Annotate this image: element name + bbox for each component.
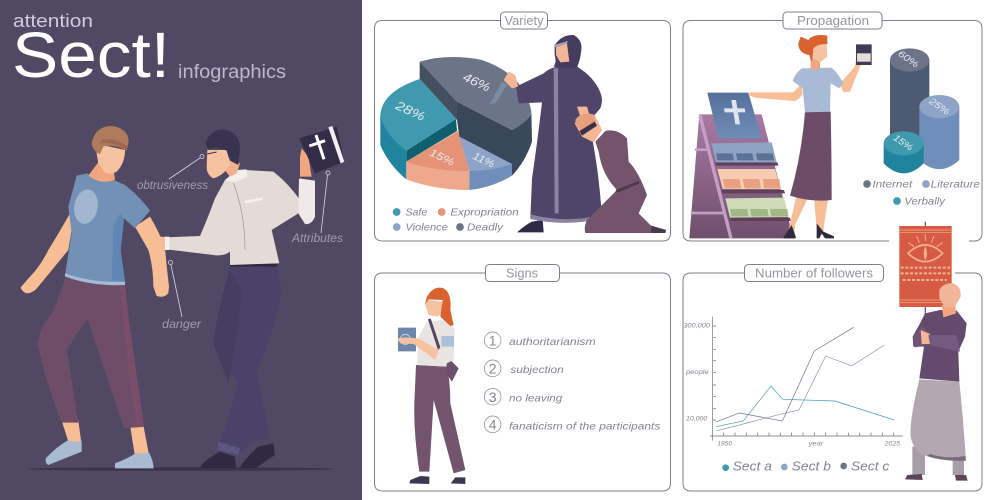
heading: Propagation: Propagation	[797, 14, 869, 28]
legend: variety: Deadly	[467, 223, 504, 234]
figure: victim man	[21, 126, 169, 468]
list item 3	[484, 388, 563, 405]
heading: Propagation	[783, 12, 882, 29]
icon: cross book	[299, 126, 344, 173]
legend: propagation	[863, 180, 981, 207]
pie chart: 15%	[427, 147, 457, 169]
line chart: 10,000	[686, 416, 708, 423]
list item 2: subjection	[510, 365, 564, 376]
figure: hooded figure with knife	[489, 35, 602, 232]
legend: followers: Sect b	[792, 459, 831, 473]
cylinder chart	[884, 48, 959, 173]
list item 3: 3	[489, 389, 497, 405]
callout: Attributes: Attributes	[291, 233, 343, 245]
cylinder chart: 15%	[892, 132, 915, 153]
ground shadow	[28, 467, 334, 471]
heading: Variety: Variety	[504, 14, 544, 28]
line chart	[683, 317, 903, 448]
literature stand	[689, 93, 793, 238]
pie chart: 11%	[471, 150, 497, 171]
callout: obtrusiveness	[137, 154, 208, 192]
title: Sect!: Sect!	[12, 19, 170, 91]
legend: variety: Safe	[405, 208, 428, 219]
callout: Attributes	[291, 171, 343, 245]
legend: variety: Expropriation	[450, 208, 519, 219]
cylinder chart: 25%	[926, 95, 951, 117]
pie chart: 28%	[392, 98, 427, 124]
legend: propagation: Literature	[931, 180, 981, 191]
figure: preacher man	[147, 126, 344, 468]
callout: danger: danger	[162, 319, 202, 331]
list item 4	[484, 416, 661, 433]
heading: Signs	[486, 264, 560, 282]
heading: Number of followers: Number of followers	[755, 266, 873, 280]
panel: Number of followers	[683, 222, 982, 491]
legend: propagation: Internet	[872, 180, 914, 191]
legend: variety: Violence	[405, 223, 448, 234]
list: signs	[484, 332, 661, 433]
heading: Number of followers	[744, 264, 884, 282]
title: infographics: infographics	[178, 62, 286, 83]
line chart: people	[685, 369, 709, 376]
line chart: 2025	[884, 441, 900, 448]
figure: woman with book	[397, 288, 465, 484]
list item 1: 1	[489, 333, 497, 349]
list item 2	[484, 360, 564, 377]
callout: obtrusiveness: obtrusiveness	[137, 180, 208, 192]
legend: followers: Sect a	[733, 459, 772, 473]
figure: kneeling figure	[575, 114, 666, 233]
legend: variety	[393, 208, 519, 234]
list item 4: fanaticism of the participants	[509, 421, 661, 432]
figure: bald man with banner	[899, 222, 968, 481]
pie chart: 46%	[461, 70, 492, 95]
list item 4: 4	[489, 417, 497, 433]
figure: woman with leaflet	[748, 35, 872, 238]
list item 3: no leaving	[509, 393, 563, 404]
line chart: year	[808, 441, 824, 448]
title: attention: attention	[13, 11, 93, 31]
pie chart	[380, 57, 532, 190]
cylinder chart: 60%	[896, 48, 920, 70]
list item 1	[484, 332, 596, 349]
heading: Variety	[500, 12, 548, 29]
line chart: 1950	[717, 441, 732, 448]
heading: Signs: Signs	[506, 266, 538, 280]
legend: followers	[722, 459, 890, 473]
panel: Signs	[374, 264, 670, 491]
panel: Variety	[374, 12, 670, 241]
line chart: 300,000	[683, 323, 710, 330]
list item 1: authoritarianism	[509, 337, 596, 348]
banner	[899, 226, 952, 307]
panel: Propagation	[683, 12, 982, 241]
legend: followers: Sect c	[851, 459, 890, 473]
callout: danger	[162, 260, 202, 331]
list item 2: 2	[489, 361, 497, 377]
legend: propagation: Verbally	[904, 196, 946, 207]
panel: left title panel	[0, 0, 362, 500]
